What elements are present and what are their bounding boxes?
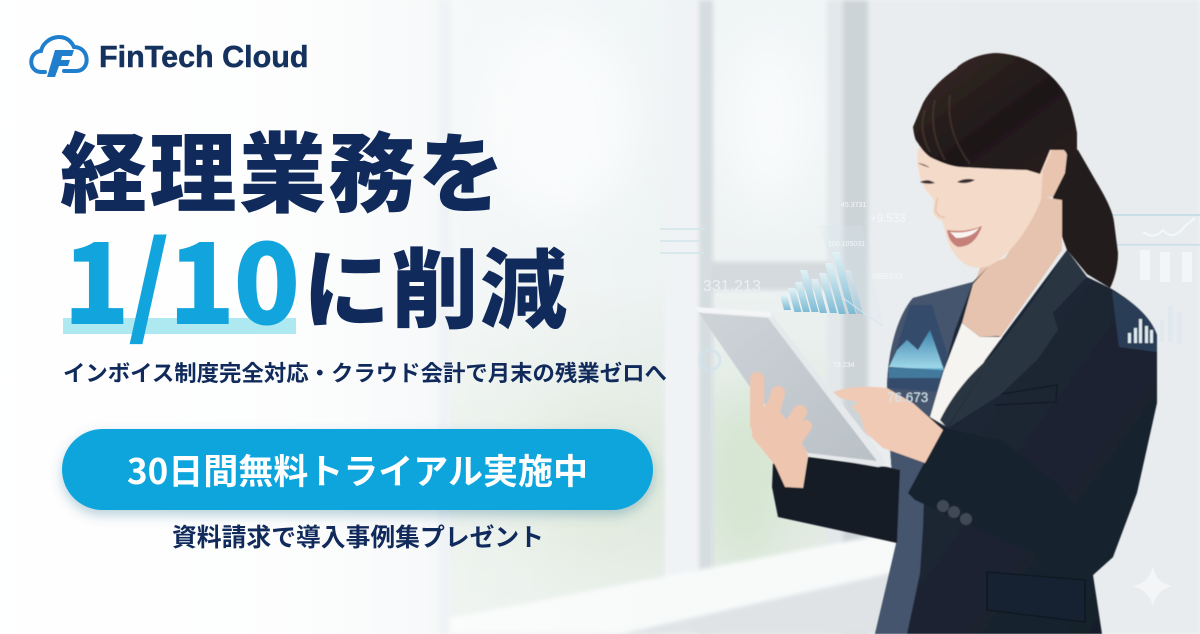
window sill <box>450 532 895 634</box>
sleeve right <box>908 428 1113 575</box>
hologram panel <box>820 226 882 325</box>
hair <box>913 53 1077 174</box>
shoulder hologram panel <box>1112 291 1157 352</box>
blouse <box>930 323 1002 427</box>
hologram numbers: 331.213 <box>703 278 761 295</box>
sleeve left <box>772 457 900 543</box>
nose shadow <box>936 198 945 217</box>
hologram bar chart <box>780 252 863 314</box>
skin chest <box>962 262 1040 337</box>
CTA button <box>62 429 653 510</box>
subheading: インボイス制度完全対応・クラウド会計で月末の残業ゼロへ <box>63 356 667 388</box>
hologram right panel <box>1092 214 1200 344</box>
left hand <box>752 379 808 488</box>
eyes <box>920 179 975 184</box>
woman <box>695 53 1157 634</box>
mouth <box>947 226 982 247</box>
wordmark: FinTech Cloud <box>99 40 309 74</box>
hologram on lapel <box>888 305 947 392</box>
headline line 1: 経理業務を <box>60 105 508 231</box>
hologram numbers: 4885333 <box>871 272 903 281</box>
logo <box>31 37 309 77</box>
icon: cloud with F <box>31 37 87 77</box>
headline 1/10: 1/10 <box>63 196 298 356</box>
holographic data overlay <box>660 202 1200 370</box>
hologram numbers: +9.533 <box>870 213 906 225</box>
CTA button: 30日間無料トライアル実施中 <box>127 444 588 495</box>
jacket body <box>875 250 1157 634</box>
front pocket <box>987 572 1085 622</box>
ponytail <box>1053 145 1118 288</box>
hologram numbers <box>703 202 906 369</box>
lapel <box>940 250 1087 428</box>
headline line 2 rest: に削減 <box>303 221 568 347</box>
sparkle icon <box>1133 566 1172 606</box>
hologram numbers: 100 105031 <box>828 241 865 248</box>
buttons <box>937 500 972 525</box>
hair highlights <box>922 95 970 164</box>
note text: 資料請求で導入事例集プレゼント <box>172 518 544 554</box>
hologram circle <box>700 350 720 370</box>
tablet <box>695 307 885 467</box>
right hand <box>833 387 943 463</box>
hologram numbers: 45.3731 <box>841 202 866 209</box>
neck <box>955 197 1062 345</box>
shoulder hologram bars <box>1128 319 1153 343</box>
jacket lining <box>875 282 973 634</box>
eyebrows <box>917 163 930 168</box>
headline highlight underline <box>63 318 296 334</box>
hologram number: 76.673 <box>887 390 928 405</box>
face <box>917 100 1055 268</box>
breast pocket <box>995 385 1057 405</box>
hologram numbers: 73.234 <box>833 362 855 369</box>
ear <box>1041 147 1067 198</box>
